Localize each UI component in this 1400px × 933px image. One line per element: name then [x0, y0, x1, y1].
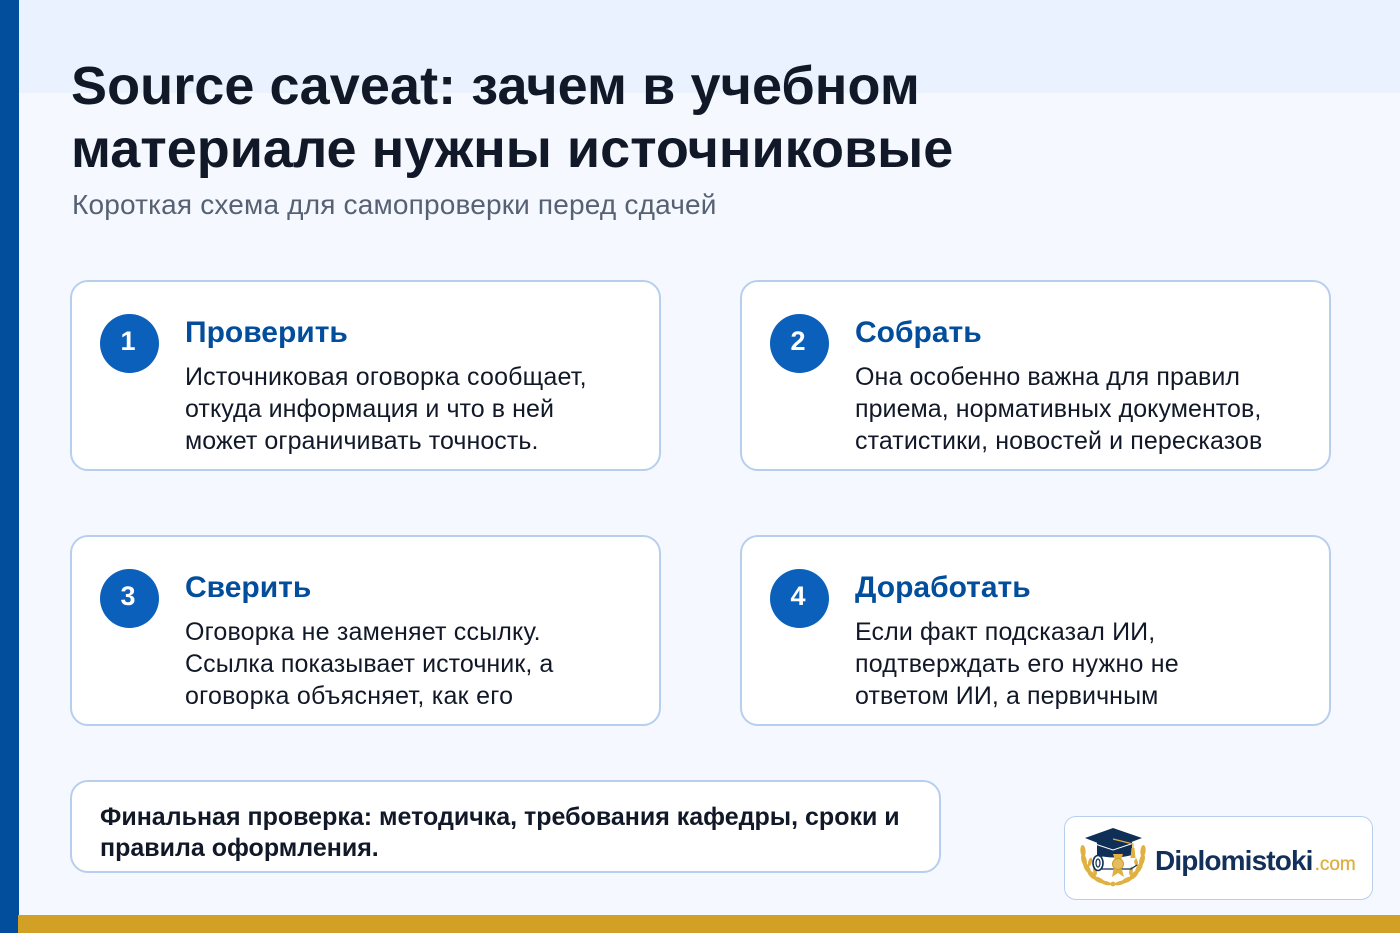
number badge 4: 4: [790, 581, 806, 611]
text: step 1: откуда информация и что в ней: [185, 395, 554, 423]
number badge 3: [100, 569, 159, 628]
final check text: Финальная проверка: методичка, требования кафедры, сроки и: [100, 803, 900, 831]
subtitle: Короткая схема для самопроверки перед сдачей: [72, 189, 717, 220]
text: step 3: Оговорка не заменяет ссылку.: [185, 618, 541, 646]
bottom gold bar: [18, 915, 1400, 933]
text: step 1: Источниковая оговорка сообщает,: [185, 363, 587, 391]
title: материале нужны источниковые: [71, 119, 953, 179]
final check text: правила оформления.: [100, 834, 379, 862]
panel: step 2: [740, 280, 1331, 471]
text: step 4: ответом ИИ, а первичным: [855, 682, 1158, 710]
icon: graduation cap with laurel: [1080, 828, 1146, 886]
heading: Собрать: Собрать: [855, 316, 982, 349]
text: step 4: подтверждать его нужно не: [855, 650, 1179, 678]
number badge 1: 1: [120, 326, 136, 356]
text: step 1: [185, 363, 587, 455]
text: step 2: приема, нормативных документов,: [855, 395, 1261, 423]
number badge 3: 3: [120, 581, 136, 611]
text: step 2: [855, 363, 1262, 455]
panel: final check: [70, 780, 941, 873]
text: step 3: Ссылка показывает источник, а: [185, 650, 553, 678]
logo card: [1064, 816, 1373, 900]
text: step 2: статистики, новостей и пересказов: [855, 427, 1262, 455]
title: [71, 56, 953, 179]
title: Source caveat: зачем в учебном: [71, 56, 920, 116]
text: step 4: [855, 618, 1179, 710]
panel: step 3: [70, 535, 661, 726]
text: step 3: [185, 618, 554, 710]
number badge 4: [770, 569, 829, 628]
number badge 2: 2: [790, 326, 806, 356]
heading: Доработать: Доработать: [855, 571, 1031, 604]
text: step 2: Она особенно важна для правил: [855, 363, 1240, 391]
text: step 1: может ограничивать точность.: [185, 427, 539, 455]
left accent bar: [0, 0, 19, 933]
heading: Сверить: Сверить: [185, 571, 311, 604]
panel: step 1: [70, 280, 661, 471]
logo wordmark: Diplomistoki.com: [1155, 845, 1356, 876]
final check text: [100, 803, 900, 862]
panel: step 4: [740, 535, 1331, 726]
text: step 3: оговорка объясняет, как его: [185, 682, 513, 710]
heading: Проверить: Проверить: [185, 316, 348, 349]
number badge 2: [770, 314, 829, 373]
top band: [19, 0, 1400, 93]
number badge 1: [100, 314, 159, 373]
text: step 4: Если факт подсказал ИИ,: [855, 618, 1155, 646]
